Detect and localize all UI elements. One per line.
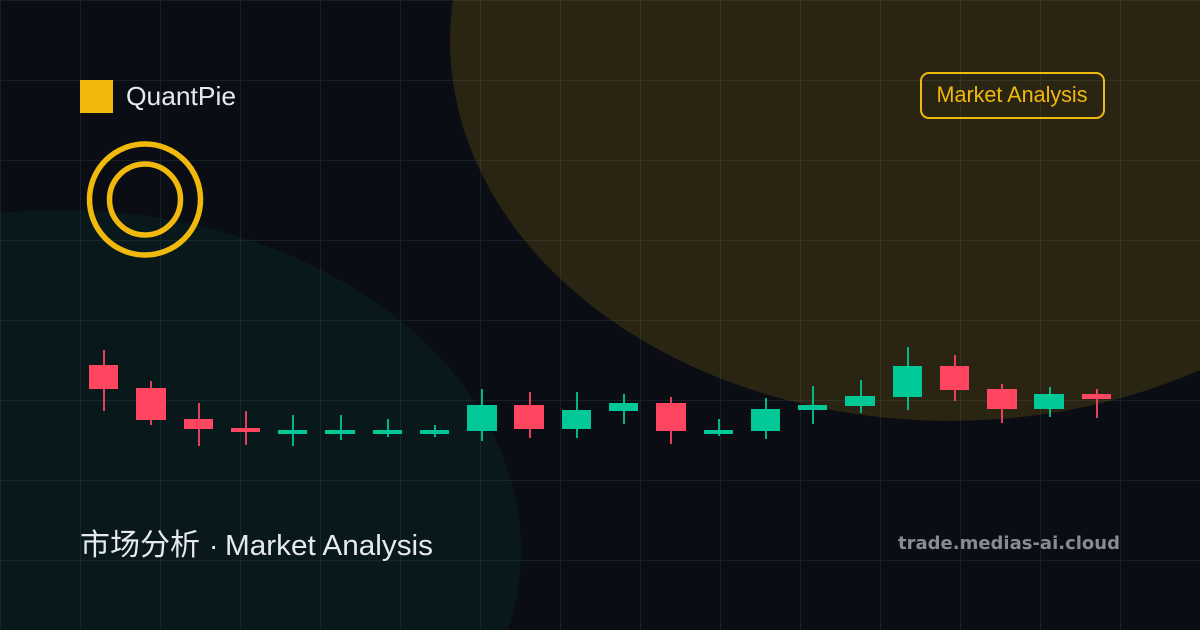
red candles — [89, 350, 1111, 446]
logo wordmark: QuantPie — [126, 81, 236, 111]
icon: concentric rings — [90, 144, 200, 255]
title — [80, 529, 433, 562]
candlestick chart — [89, 347, 1111, 446]
green candles — [278, 347, 1064, 446]
title: · — [209, 530, 218, 561]
logo square — [80, 80, 113, 113]
background shape: gold glow — [450, 0, 1200, 421]
title: 市场分析 — [80, 529, 200, 562]
title: Market Analysis — [225, 530, 433, 562]
background shape: teal glow — [0, 210, 521, 630]
badge: Market Analysis: Market Analysis — [936, 82, 1088, 107]
logo: QuantPie — [80, 80, 236, 113]
footer url: trade.medias-ai.cloud — [898, 533, 1120, 554]
badge: Market Analysis — [921, 73, 1104, 118]
